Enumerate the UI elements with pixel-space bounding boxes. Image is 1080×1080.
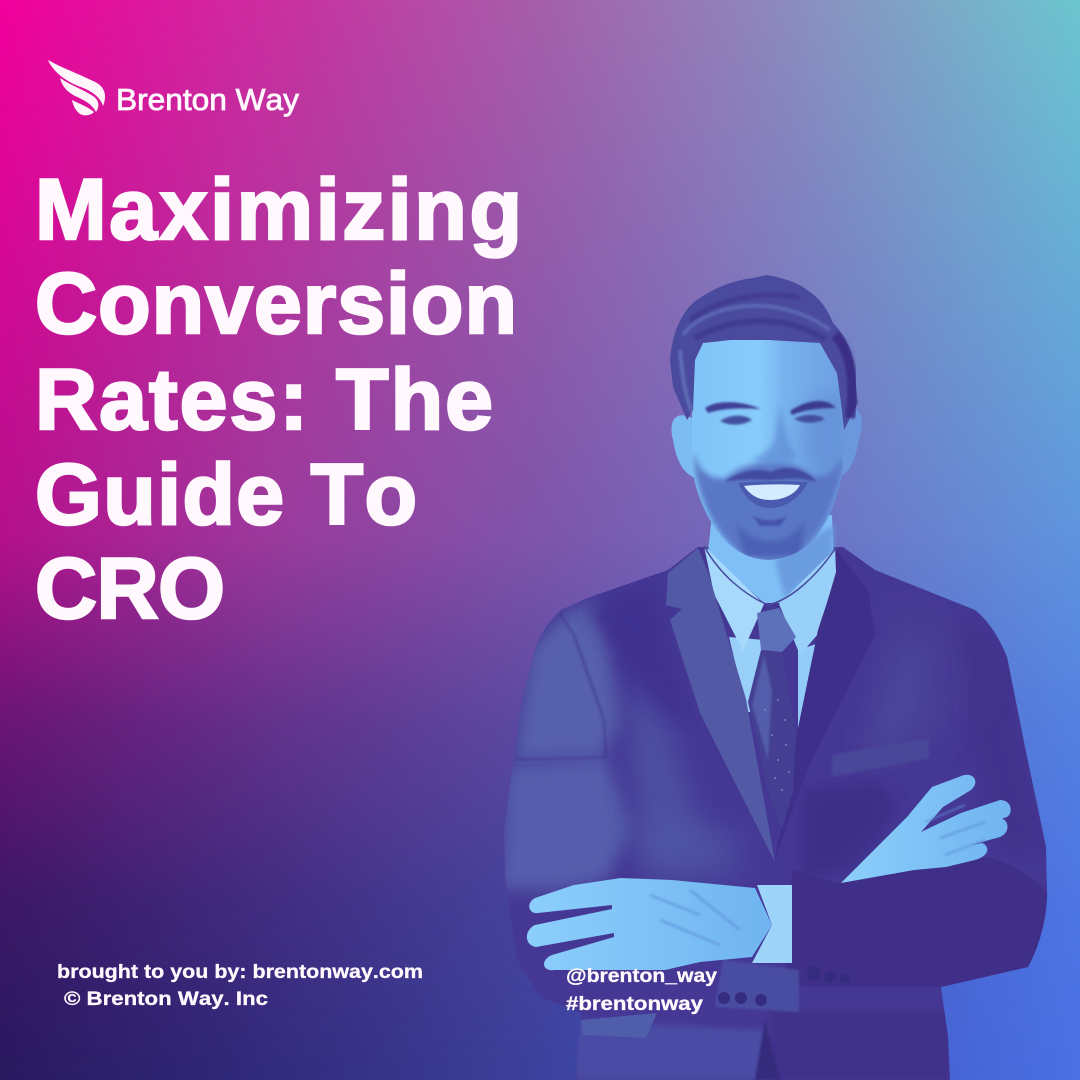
- eyes and brows: [705, 401, 836, 425]
- title: Rates: The: [35, 352, 493, 448]
- icon: wing: [48, 60, 105, 115]
- lower jacket pocket flap: [581, 1013, 657, 1038]
- brand name: Brenton Way: [116, 82, 299, 117]
- title: [35, 162, 522, 637]
- title: Guide To: [35, 447, 417, 543]
- credit text: © Brenton Way. Inc: [64, 989, 268, 1010]
- left sleeve cuff: [715, 960, 799, 1012]
- logo: [48, 60, 299, 117]
- title: Maximizing: [35, 162, 522, 258]
- credit text: [57, 962, 423, 1010]
- pocket: [832, 738, 929, 777]
- moustache and smile: [724, 468, 817, 508]
- right sleeve forearm: [785, 857, 1047, 987]
- cuff buttons: [718, 966, 850, 1006]
- neck: [708, 515, 834, 603]
- title: Conversion: [35, 256, 517, 352]
- suit jacket: [490, 530, 1070, 1080]
- social handles: #brentonway: [566, 994, 703, 1015]
- title: CRO: [35, 541, 225, 637]
- credit text: brought to you by: brentonway.com: [57, 962, 423, 983]
- shirt cuff: [752, 885, 792, 963]
- photo: businessman with crossed arms: [490, 275, 1070, 1080]
- ears: [672, 409, 862, 478]
- left hand: [527, 878, 772, 970]
- tie: [748, 608, 796, 830]
- shirt and collar: [704, 546, 836, 744]
- neck shadow: [775, 525, 834, 598]
- right hand: [841, 775, 1011, 883]
- social handles: @brenton_way: [566, 966, 717, 987]
- social handles: [566, 966, 717, 1015]
- lapels: [666, 548, 875, 862]
- hair: [670, 275, 858, 430]
- face: [692, 340, 843, 560]
- nose: [752, 405, 796, 465]
